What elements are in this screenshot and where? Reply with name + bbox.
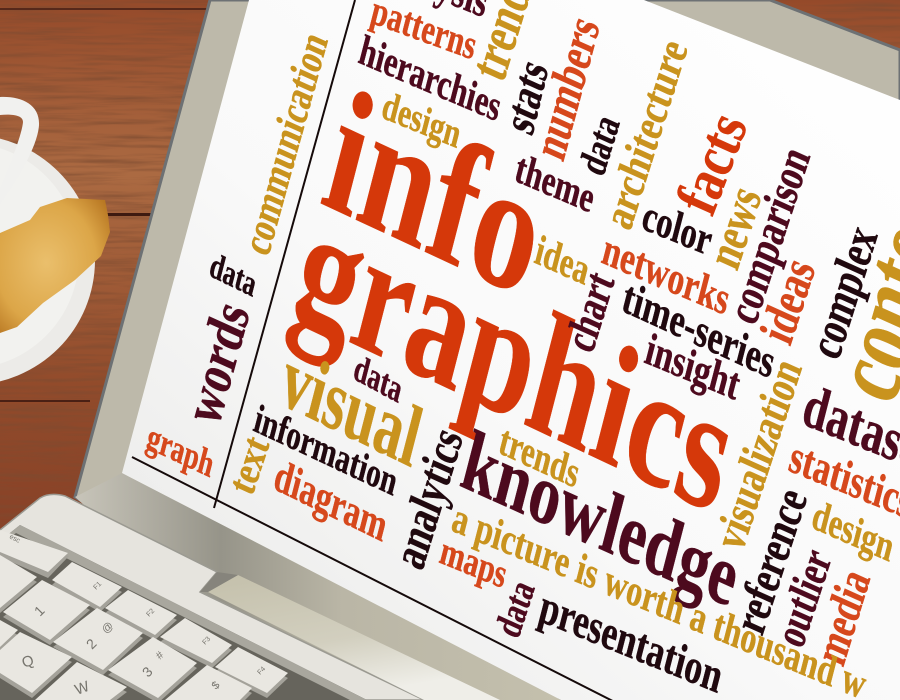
key labels: @ — [100, 620, 116, 636]
word: information: information — [250, 395, 402, 505]
word: idea: idea — [531, 227, 594, 295]
word: time-series: time-series — [618, 270, 780, 388]
word: visual: visual — [272, 329, 431, 486]
word: chart: chart — [556, 264, 624, 359]
key labels — [8, 534, 267, 699]
big word: graphics: graphics — [279, 166, 753, 550]
key labels: $ — [210, 679, 222, 692]
word: stats: stats — [495, 52, 558, 142]
key labels: W — [73, 678, 92, 699]
word: maps: maps — [436, 527, 512, 597]
word: design: design — [378, 82, 466, 157]
plate — [0, 135, 95, 385]
word: news: news — [696, 177, 772, 277]
word: data: data — [350, 347, 407, 412]
word: networks: networks — [598, 223, 735, 325]
key labels: F1 — [92, 581, 103, 591]
word: hierarchies: hierarchies — [355, 27, 506, 131]
word: reference: reference — [725, 480, 817, 642]
key labels: 1 — [31, 602, 48, 619]
key labels: F4 — [256, 666, 267, 676]
word: text: text — [219, 429, 278, 501]
key labels: Q — [20, 652, 36, 672]
big word: info: info — [309, 51, 564, 335]
word: graph: graph — [143, 416, 219, 486]
word: visualization: visualization — [705, 351, 811, 557]
word: trends: trends — [495, 417, 584, 498]
key labels: # — [154, 649, 167, 662]
word: words: words — [173, 292, 262, 433]
word: diagram: diagram — [270, 449, 393, 552]
key labels: esc — [8, 534, 21, 545]
word: knowledge: knowledge — [453, 412, 749, 626]
word: theme: theme — [511, 145, 599, 223]
icon: coffee cup handle — [0, 97, 39, 204]
keyboard deck — [0, 494, 500, 700]
word: comparison: comparison — [718, 139, 820, 331]
word: outlier: outlier — [766, 541, 841, 654]
word: analytics: analytics — [384, 420, 473, 577]
key labels: F3 — [201, 636, 212, 646]
key labels: F2 — [145, 608, 156, 618]
word: data: data — [206, 245, 261, 305]
key labels: 3 — [139, 663, 156, 680]
pastry — [0, 198, 110, 333]
word: facts: facts — [664, 103, 760, 223]
word: data: data — [488, 574, 543, 644]
divider lines — [132, 0, 660, 700]
word: complex: complex — [800, 218, 888, 367]
keyboard keys — [0, 530, 288, 700]
word: data: data — [570, 108, 628, 182]
word: media: media — [806, 561, 880, 673]
word: ideas: ideas — [749, 250, 826, 352]
word: architecture: architecture — [594, 32, 697, 236]
key labels: 2 — [83, 635, 100, 652]
word: color: color — [638, 190, 717, 265]
word: insight: insight — [641, 323, 745, 410]
